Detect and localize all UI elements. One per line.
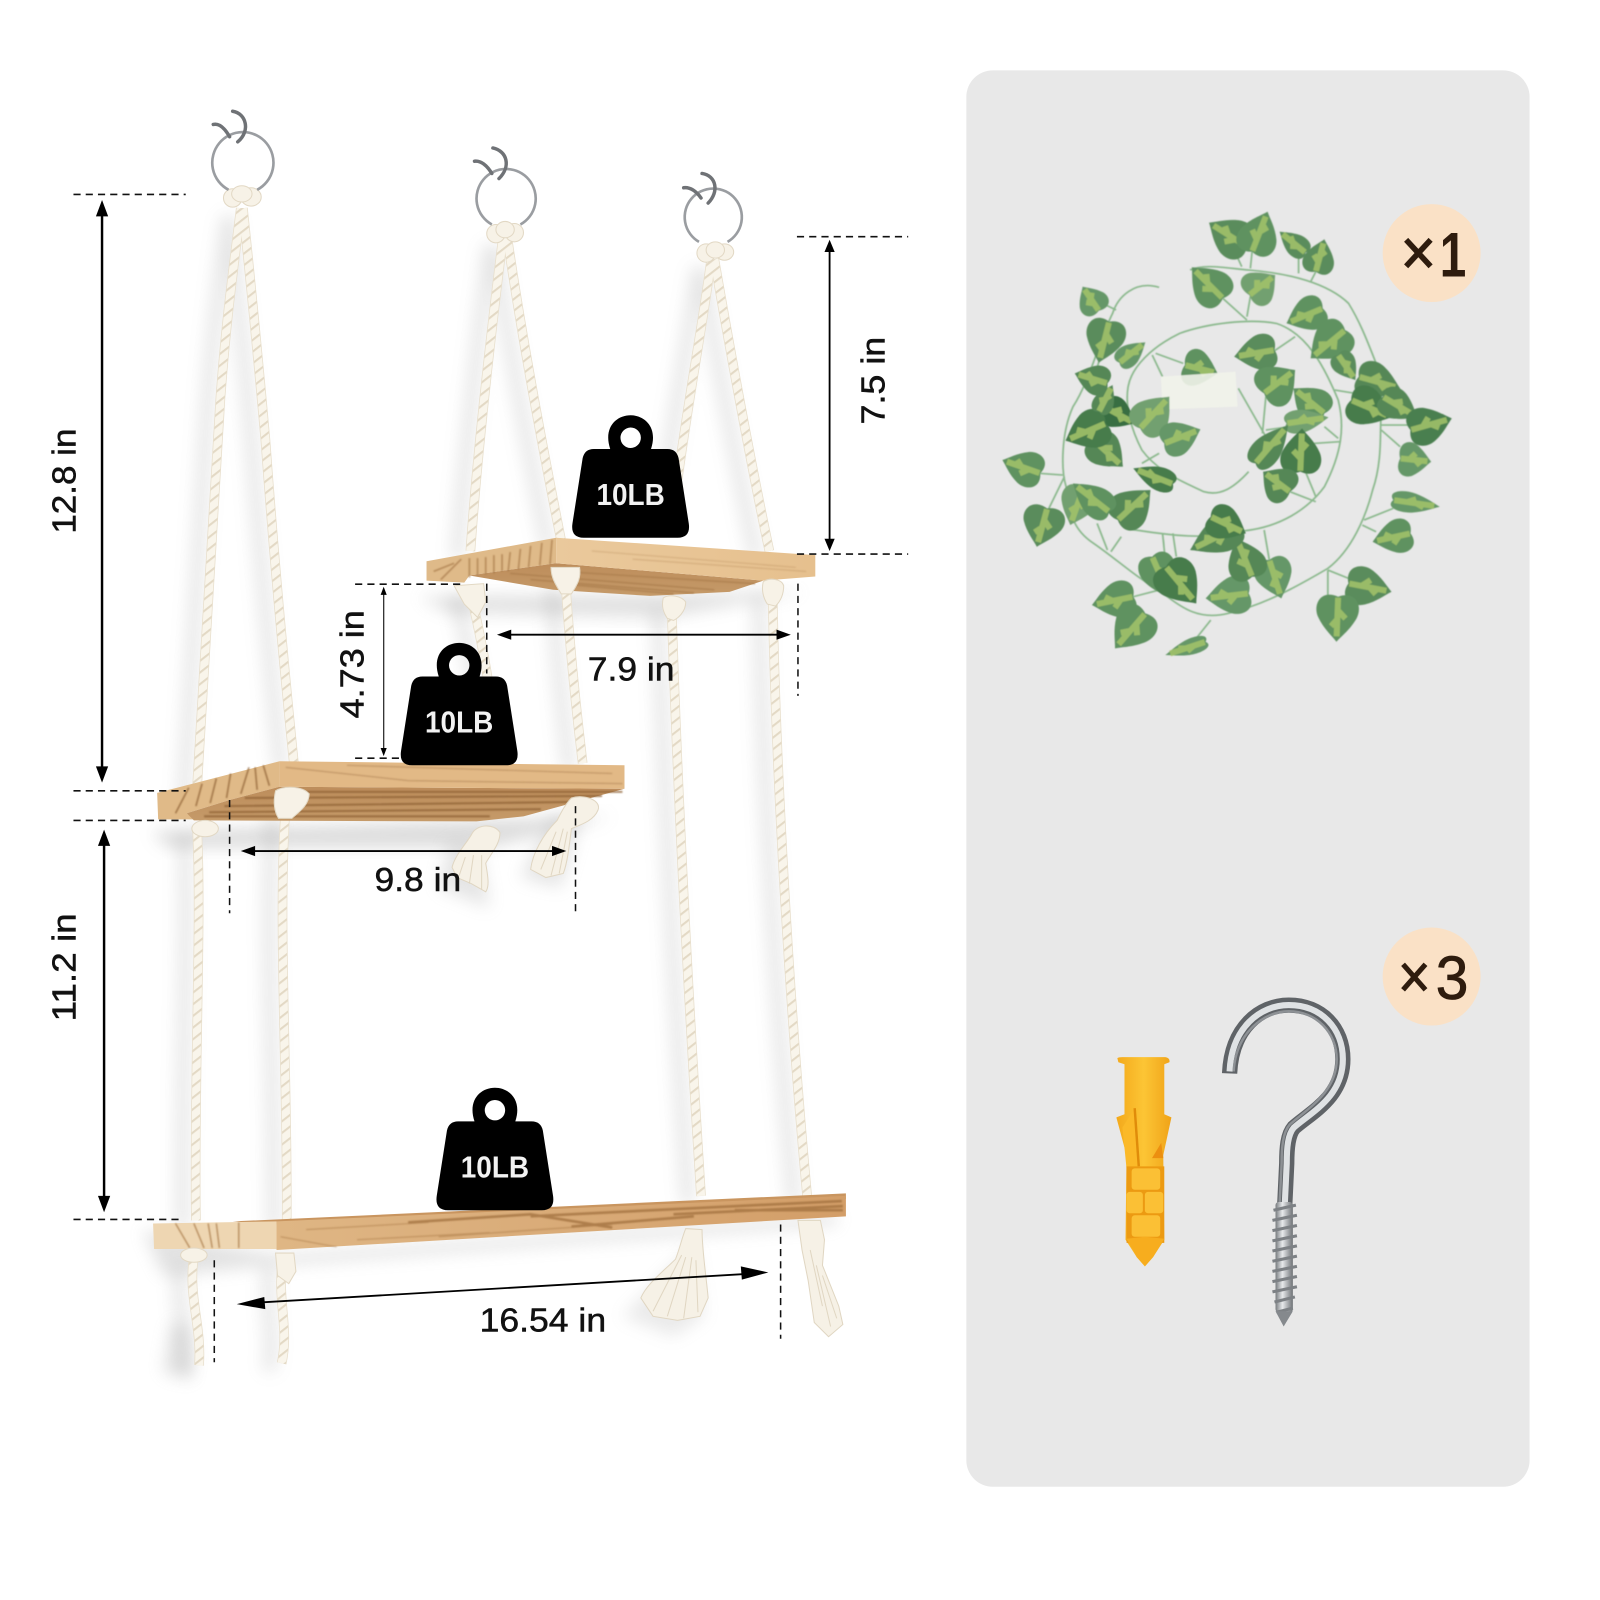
panel: accessories <box>966 70 1530 1487</box>
dimension: 11.2 in: 11.2 in <box>47 913 84 1021</box>
battery box <box>1161 372 1238 409</box>
ropes <box>192 208 807 1365</box>
dimension: 16.54 in: 16.54 in <box>480 1303 606 1340</box>
dimension: 9.8 in: 9.8 in <box>374 862 461 899</box>
dimension: 9.8 in <box>230 800 576 913</box>
dimension: 16.54 in <box>214 1224 781 1362</box>
weight icon: top shelf 10LB: 10LB <box>596 478 665 512</box>
dimension: 7.5 in <box>797 237 908 554</box>
tassel: middle shelf inner <box>452 826 500 892</box>
dimension: 4.73 in <box>334 584 464 758</box>
soft wall shadows of shelves and ropes <box>143 216 837 1380</box>
dimension: 12.8 in <box>47 194 186 791</box>
dimension: 11.2 in <box>47 820 186 1219</box>
wall hooks and rings <box>212 111 742 242</box>
weight icon: bottom shelf 10LB <box>436 1088 553 1210</box>
dimension: 7.5 in: 7.5 in <box>856 337 893 424</box>
tassel: bottom shelf outer <box>798 1220 843 1337</box>
shelf: top <box>427 538 815 596</box>
weight icon: bottom shelf 10LB: 10LB <box>461 1151 529 1185</box>
rope knots and tassels <box>181 186 843 1337</box>
tassel: middle shelf outer <box>531 797 599 878</box>
dimension: 7.9 in: 7.9 in <box>588 652 674 689</box>
badge: x1 <box>1383 204 1481 302</box>
tassel: bottom shelf inner <box>641 1229 708 1320</box>
dimension: 7.9 in <box>487 584 798 696</box>
badge: x3 <box>1383 928 1481 1026</box>
weight icon: middle shelf 10LB: 10LB <box>425 706 493 740</box>
icon: yellow wall anchor <box>1116 1057 1171 1266</box>
shelf: bottom <box>153 1193 846 1250</box>
badge: x1: 1 <box>1440 221 1466 291</box>
shelf: middle <box>157 761 624 821</box>
icon: leaf garland <box>996 205 1457 663</box>
icon: silver screw hook <box>1230 1005 1343 1327</box>
weight icon: top shelf 10LB <box>572 415 689 538</box>
badge: x3: 3 <box>1436 944 1468 1012</box>
dimension: 12.8 in: 12.8 in <box>47 429 84 534</box>
dimension: 4.73 in: 4.73 in <box>334 610 371 718</box>
weight icon: middle shelf 10LB <box>401 643 518 765</box>
